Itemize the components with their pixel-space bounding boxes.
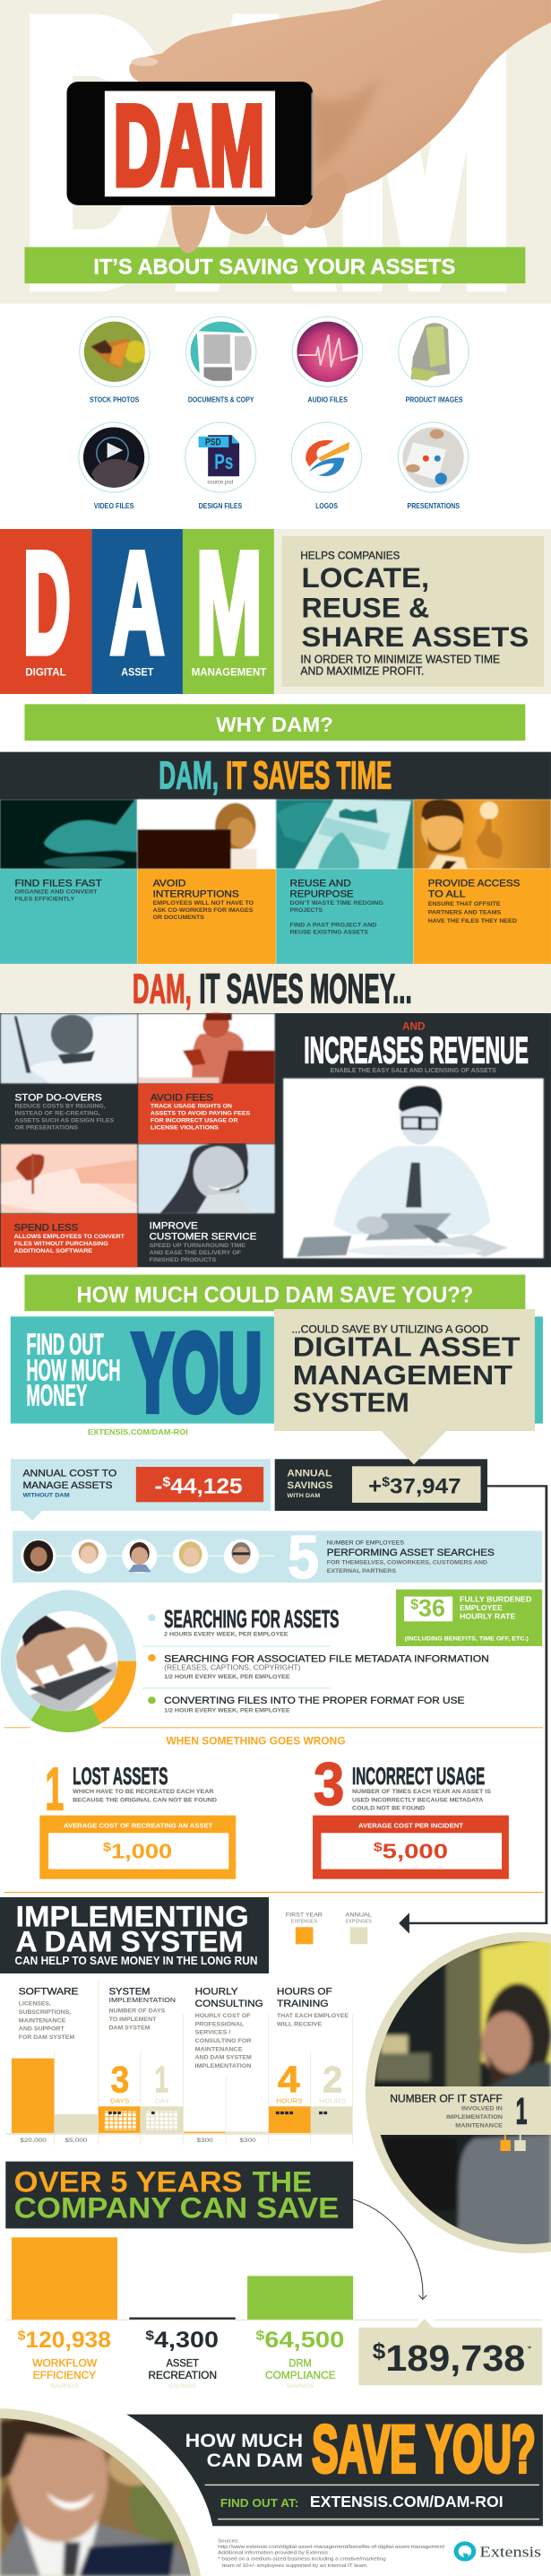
panel: savings calculator [1, 1309, 543, 1732]
panel: hourly rate: 36 [418, 1596, 445, 1622]
panel: annual savings: $ [382, 1476, 390, 1489]
column text: hours of training: THAT EACH EMPLOYEE [277, 2012, 349, 2019]
panel: money savings and revenue [0, 964, 551, 1311]
icon: hand holding phone [67, 0, 551, 253]
callout: could save with DAM system: ...COULD SAVE BY UTILIZING A GOOD [292, 1323, 488, 1335]
panel: provide access to all: PARTNERS AND TEAMS [428, 908, 501, 915]
panel: lost assets: 1,000 [111, 1841, 172, 1863]
chart labels: DAYS [110, 2097, 129, 2105]
panel: incorrect usage: $ [374, 1841, 383, 1854]
column text: hours of training [277, 1985, 349, 2027]
photo: man touching screen [414, 800, 551, 869]
panel: helps companies: IN ORDER TO MINIMIZE WASTED TIME [300, 652, 500, 665]
chart labels: 2 [323, 2060, 342, 2101]
column text: hourly consulting: HOURLY COST OF [195, 2012, 251, 2019]
list: searching for metadata: (RELEASES, CAPTIONS, COPYRIGHT) [164, 1663, 300, 1671]
column text: system implementation: IMPLEMENTATION [109, 1997, 176, 2004]
icon: calendar one day [146, 2112, 178, 2130]
panel: avoid fees: AVOID FEES [151, 1091, 213, 1103]
icon: Extensis logo: Extensis [479, 2543, 541, 2560]
panel: reuse and repurpose: DON’T WASTE TIME REDOING [290, 899, 383, 906]
panel: provide access to all [414, 800, 551, 964]
icon: design files: PSD [205, 436, 221, 447]
panel: annual cost: - [155, 1474, 163, 1498]
list: converting files: CONVERTING FILES INTO THE PROPER FORMAT FOR USE [164, 1695, 464, 1706]
icon: four hours [276, 2112, 293, 2114]
callout: could save with DAM system [274, 1309, 535, 1431]
stat: workflow efficiency [18, 2327, 111, 2390]
list: searching for assets [142, 1606, 339, 1647]
stat: asset recreation: 4,300 [154, 2327, 219, 2353]
stat: DRM compliance: DRM [288, 2357, 312, 2369]
panel: reuse and repurpose: PROJECTS [290, 906, 323, 914]
panel: incorrect usage: COULD NOT BE FOUND [352, 1804, 425, 1811]
panel: employees performing searches [13, 1523, 542, 1592]
panel: helps companies: LOCATE, [302, 563, 429, 594]
panel: IT staff band: INVOLVED IN [461, 2105, 503, 2112]
arrow: curve to total [353, 2199, 426, 2299]
banner: how much can DAM save you: EXTENSIS.COM/DAM-ROI [310, 2494, 504, 2511]
panel: provide access to all: TO ALL [428, 889, 466, 899]
heading: over five years [5, 2162, 353, 2228]
chart: five year savings bars [6, 2237, 542, 2320]
panel: annual cost: WITHOUT DAM [22, 1491, 70, 1498]
column text: hourly consulting: CONSULTING [195, 1998, 263, 2009]
heading: DAM it saves time: IT SAVES TIME [226, 754, 392, 797]
text block: sources: Additional information provided by Extensis [218, 2551, 328, 2556]
panel: avoid fees: TRACK USAGE RIGHTS ON [151, 1102, 232, 1109]
panel: incorrect usage: NUMBER OF TIMES EACH YEAR AN ASSET IS [352, 1788, 491, 1795]
asset type labels: PRODUCT IMAGES [406, 396, 463, 403]
icon: video files [79, 422, 149, 492]
panel: incorrect usage: AVERAGE COST PER INCIDENT [358, 1822, 463, 1829]
chart labels: 3 [111, 2060, 129, 2101]
stat: DRM compliance: 64,500 [264, 2327, 344, 2353]
stat: asset recreation: SAVINGS [168, 2383, 196, 2390]
panel: helps companies: SHARE ASSETS [302, 622, 529, 653]
panel: annual cost: ANNUAL COST TO [22, 1468, 117, 1479]
text block: sources [218, 2539, 445, 2569]
panel: lost assets: 1 [45, 1755, 64, 1823]
stat: workflow efficiency: $ [18, 2329, 26, 2343]
text block: sources: * based on a medium-sized business including a creative/marketing [218, 2557, 386, 2563]
panel: improve customer service: AND EASE THE DELIVERY OF [150, 1249, 242, 1256]
stat: asset recreation [145, 2327, 219, 2390]
stat: workflow efficiency: WORKFLOW [32, 2357, 98, 2369]
asset type labels: PRESENTATIONS [408, 502, 460, 510]
chart labels: $20,000 [20, 2137, 47, 2144]
heading: DAM it saves money: DAM, [133, 966, 192, 1011]
icon: audio files [292, 317, 363, 386]
asset type labels: VIDEO FILES [94, 502, 134, 510]
panel: reuse and repurpose: FIND A PAST PROJECT AND [290, 921, 376, 928]
icon: design files [185, 422, 255, 492]
panel: what DAM means and time savings [0, 523, 551, 964]
chart: time spent donut with typing photo [1, 1590, 136, 1732]
heading: how much could DAM save you [24, 1275, 525, 1311]
chart labels: $300 [239, 2137, 256, 2144]
asset type labels: LOGOS [315, 502, 338, 510]
heading: implementing a DAM system: CAN HELP TO SAVE MONEY IN THE LONG RUN [14, 1954, 257, 1967]
stat: total savings: * [528, 2345, 532, 2354]
panel: spend less [1, 1144, 137, 1267]
photo: hand on mouse [0, 800, 137, 869]
photo: hand writing on papers [1, 1144, 137, 1213]
tagline banner: IT’S ABOUT SAVING YOUR ASSETS [93, 256, 455, 279]
stat: asset recreation: RECREATION [149, 2370, 217, 2381]
panel: when something goes wrong and implementation [0, 1486, 547, 2069]
chart: implementation costs [6, 1981, 352, 2145]
column text: hours of training: TRAINING [277, 1998, 329, 2009]
icon: hand holding phone: DAM [114, 82, 264, 210]
DAM acronym blocks: DIGITAL [25, 665, 66, 678]
list: converting files [148, 1695, 464, 1713]
photo: hands and report [276, 800, 413, 869]
stat: asset recreation: ASSET [167, 2357, 199, 2369]
panel: find files fast [0, 800, 137, 964]
url: ROI calculator: EXTENSIS.COM/DAM-ROI [88, 1428, 188, 1436]
heading: implementing a DAM system [0, 1897, 269, 1973]
panel: avoid interruptions: INTERRUPTIONS [153, 889, 239, 899]
panel: annual savings: + [368, 1474, 383, 1498]
legend: expense types: EXPENSES [346, 1920, 372, 1924]
asset type labels: DESIGN FILES [199, 502, 243, 510]
panel: avoid interruptions: ASK CO-WORKERS FOR IMAGES [153, 906, 254, 914]
icon: stock photos [80, 317, 150, 386]
photo: smiling man with tablet [0, 2408, 206, 2576]
legend: expense types [286, 1912, 372, 1944]
panel: employees performing searches: 5 [288, 1523, 319, 1592]
panel: lost assets: LOST ASSETS [73, 1764, 168, 1790]
heading: DAM it saves time: DAM, [159, 754, 219, 797]
DAM acronym blocks [0, 523, 274, 694]
panel: IT staff band: 1 [516, 2092, 527, 2132]
tagline banner [24, 247, 525, 283]
panel: spend less: ALLOWS EMPLOYEES TO CONVERT [14, 1233, 125, 1240]
stat: DRM compliance: COMPLIANCE [265, 2370, 336, 2381]
panel: incorrect usage: USED INCORRECTLY BECAUSE METADATA [352, 1796, 484, 1803]
panel: annual cost: $ [162, 1476, 170, 1489]
text block: sources: http://www.extensis.com/digital-asset-management/benefits-of-digital-asset-management [218, 2545, 445, 2550]
column text: software: FOR DAM SYSTEM [19, 2034, 74, 2041]
panel: helps companies: HELPS COMPANIES [300, 549, 400, 561]
icon: presentations [398, 422, 469, 492]
heading: DAM it saves money [0, 964, 551, 1013]
column text: hourly consulting: PROFESSIONAL [195, 2020, 245, 2027]
legend: expense types: ANNUAL [346, 1912, 372, 1918]
panel: find files fast: FIND FILES FAST [14, 877, 102, 889]
photo: stressed woman with tablet [138, 1012, 275, 1083]
stat: DRM compliance [256, 2327, 344, 2390]
banner: how much can DAM save you: FIND OUT AT: [220, 2496, 298, 2510]
column text: hourly consulting: MAINTENANCE [195, 2045, 243, 2052]
heading: when something goes wrong: WHEN SOMETHING GOES WRONG [167, 1735, 346, 1747]
panel: annual savings [275, 1431, 487, 1511]
panel: lost assets: AVERAGE COST OF RECREATING AN ASSET [64, 1822, 213, 1829]
column text: system implementation: SYSTEM [109, 1985, 150, 1997]
banner: find out how much money you: YOU [133, 1313, 262, 1433]
chart labels: $300 [197, 2137, 213, 2144]
DAM acronym blocks: A [110, 523, 164, 683]
panel: incorrect usage: 5,000 [383, 1841, 448, 1863]
column text: hours of training: WILL RECEIVE [277, 2020, 322, 2027]
photo: smiling headset operator [138, 1144, 275, 1213]
panel: lost assets [39, 1755, 236, 1879]
panel: annual savings: WITH DAM [287, 1492, 320, 1499]
chart labels: 1 [155, 2060, 168, 2101]
panel: provide access to all: ENSURE THAT OFFSITE [428, 900, 501, 907]
panel: employees performing searches: EXTERNAL PARTNERS [327, 1567, 396, 1574]
chart labels: 4 [278, 2060, 300, 2101]
column text: system implementation: DAM SYSTEM [109, 2024, 150, 2031]
panel: find files fast: ORGANIZE AND CONVERT [14, 888, 98, 895]
panel: IT staff band [358, 2086, 551, 2151]
panel: incorrect usage: 3 [314, 1749, 344, 1817]
heading: implementing a DAM system: A DAM SYSTEM [16, 1926, 243, 1958]
photo: businessman with clipboard [283, 1079, 544, 1258]
panel: employees performing searches: FOR THEMSELVES, COWORKERS, CUSTOMERS AND [327, 1558, 487, 1566]
icon: Extensis logo [456, 2543, 541, 2561]
panel: lost assets: WHICH HAVE TO BE RECREATED EACH YEAR [73, 1788, 214, 1795]
panel: avoid fees: ASSETS TO AVOID PAYING FEES [151, 1109, 250, 1116]
panel: hourly rate [396, 1590, 542, 1646]
panel: IT staff band: IMPLEMENTATION [446, 2113, 503, 2121]
photo: man head on laptop [1, 1014, 137, 1083]
icon: two hours [319, 2112, 327, 2114]
arrow: savings connector [399, 1486, 547, 1934]
panel: reuse and repurpose: REUSE EXISTING ASSETS [290, 928, 368, 935]
stat: workflow efficiency: 120,938 [25, 2327, 111, 2353]
panel: annual cost [11, 1459, 271, 1521]
heading: implementing a DAM system: IMPLEMENTING [16, 1901, 249, 1933]
list: searching for assets: 2 HOURS EVERY WEEK, PER EMPLOYEE [164, 1630, 288, 1637]
list: searching for metadata: SEARCHING FOR ASSOCIATED FILE METADATA INFORMATION [164, 1652, 489, 1664]
panel: annual savings: ANNUAL [287, 1468, 332, 1479]
panel: annual savings: 37,947 [390, 1474, 461, 1498]
panel: reuse and repurpose [276, 800, 413, 964]
panel: hero [0, 0, 551, 510]
panel: annual savings: SAVINGS [287, 1479, 332, 1491]
panel: hourly rate: (INCLUDING BENEFITS, TIME OFF, ETC.) [405, 1635, 529, 1642]
panel: find files fast: FILES EFFICIENTLY [14, 895, 74, 902]
panel: reuse and repurpose: REUSE AND [290, 877, 351, 889]
list: searching for metadata [142, 1652, 489, 1688]
column text: software: SOFTWARE [19, 1985, 78, 1997]
column text: hourly consulting: SERVICES / [195, 2028, 230, 2035]
column text: software [19, 1985, 78, 2041]
callout: could save with DAM system: SYSTEM [293, 1387, 409, 1418]
callout: could save with DAM system: MANAGEMENT [293, 1360, 512, 1391]
icon: employee portraits [21, 1540, 259, 1574]
banner: find out how much money you: FIND OUT [26, 1327, 104, 1361]
column text: hourly consulting: AND DAM SYSTEM [195, 2053, 252, 2060]
heading: over five years: THE [253, 2166, 312, 2199]
asset types grid [79, 317, 469, 510]
panel: reuse and repurpose: REPURPOSE [290, 889, 354, 899]
asset type labels [90, 396, 463, 510]
panel: improve customer service: IMPROVE [150, 1219, 198, 1231]
stat: workflow efficiency: SAVINGS [50, 2383, 79, 2390]
panel: IT staff band: MAINTENANCE [455, 2122, 503, 2129]
column text: software: MAINTENANCE [19, 2017, 65, 2024]
DAM acronym blocks: D [23, 523, 71, 683]
panel: helps companies: AND MAXIMIZE PROFIT. [300, 664, 424, 677]
column text: hourly consulting: IMPLEMENTATION [195, 2062, 251, 2069]
asset type labels: DOCUMENTS & COPY [188, 396, 254, 403]
panel: hourly rate: EMPLOYEE [460, 1604, 503, 1612]
DAM acronym blocks: ASSET [121, 665, 153, 678]
panel: stop do-overs: ASSETS SUCH AS DESIGN FILES [14, 1116, 114, 1123]
heading: DAM it saves time [0, 752, 551, 800]
stat: total savings: 189,738 [385, 2338, 525, 2379]
chart labels: $5,000 [65, 2137, 87, 2144]
banner: how much can DAM save you [126, 2412, 543, 2526]
column text: software: SUBSCRIPTIONS, [19, 2008, 71, 2016]
panel: stop do-overs: STOP DO-OVERS [14, 1091, 102, 1103]
banner: how much can DAM save you: HOW MUCH [185, 2429, 303, 2451]
legend: expense types: FIRST YEAR [286, 1912, 323, 1918]
panel: avoid interruptions: EMPLOYEES WILL NOT HAVE TO [153, 899, 254, 906]
heading: over five years: OVER 5 YEARS [14, 2166, 243, 2199]
panel: avoid fees [138, 1012, 275, 1143]
panel: increases revenue [283, 1020, 544, 1258]
panel: stop do-overs [1, 1014, 137, 1131]
banner: find out how much money you [11, 1313, 543, 1433]
chart labels: HOURS [319, 2097, 346, 2105]
banner: find out how much money you: MONEY [26, 1378, 87, 1412]
panel: stop do-overs: REDUCE COSTS BY REUSING, [14, 1102, 106, 1109]
panel: hourly rate: $ [410, 1596, 418, 1612]
heading: why DAM [24, 704, 525, 741]
panel: spend less: FILES WITHOUT PURCHASING [14, 1240, 108, 1247]
asset type labels: AUDIO FILES [308, 396, 348, 403]
panel: avoid interruptions: OR DOCUMENTS [153, 914, 204, 921]
list: converting files: 1/2 HOUR EVERY WEEK, PER EMPLOYEE [164, 1706, 290, 1713]
column text: system implementation [109, 1985, 176, 2031]
icon: product images [399, 317, 469, 386]
chart labels: DAY [155, 2097, 170, 2105]
panel: savings calculator: SEARCHING FOR ASSETS [164, 1606, 339, 1633]
icon: design files: Ps [214, 450, 233, 474]
column text: software: AND SUPPORT [19, 2025, 65, 2032]
panel: improve customer service [138, 1144, 275, 1263]
panel: improve customer service: SPEED UP TURNAROUND TIME [150, 1242, 245, 1249]
heading: how much could DAM save you: HOW MUCH COULD DAM SAVE YOU?? [76, 1283, 473, 1307]
panel: stop do-overs: INSTEAD OF RE-CREATING, [14, 1109, 100, 1116]
banner: find out how much money you: HOW MUCH [26, 1353, 121, 1387]
panel: spend less: SPEND LESS [14, 1222, 78, 1233]
panel: provide access to all: HAVE THE FILES THEY NEED [428, 917, 517, 924]
DAM acronym blocks: MANAGEMENT [192, 665, 266, 678]
legend: expense types: EXPENSES [291, 1920, 317, 1924]
DAM acronym blocks: M [196, 523, 263, 683]
column text: hours of training: HOURS OF [277, 1985, 332, 1997]
panel: avoid fees: LICENSE VIOLATIONS [151, 1123, 219, 1131]
chart labels [20, 2060, 346, 2144]
panel: IT staff band: NUMBER OF IT STAFF [390, 2093, 503, 2105]
column text: hourly consulting: HOURLY [195, 1985, 238, 1997]
panel: avoid interruptions [137, 800, 276, 964]
banner: how much can DAM save you: CAN DAM [207, 2449, 303, 2471]
column text: hourly consulting: CONSULTING FOR [195, 2037, 252, 2044]
stat: DRM compliance: $ [256, 2329, 265, 2343]
icon: design files: source.psd [207, 480, 234, 486]
column text: hourly consulting [195, 1985, 263, 2069]
stat: workflow efficiency: EFFICIENCY [33, 2370, 96, 2381]
heading: why DAM: WHY DAM? [216, 714, 333, 736]
stat: total savings: $ [373, 2338, 386, 2364]
text block: sources: team of 10+/- employees supported by an internal IT team. [222, 2563, 369, 2569]
callout: could save with DAM system: DIGITAL ASSET [293, 1331, 521, 1363]
panel: avoid fees: FOR INCORRECT USAGE OR [151, 1116, 238, 1123]
panel: stop do-overs: OR PRESENTATIONS [14, 1123, 78, 1131]
text block: sources: Sources: [218, 2539, 239, 2544]
panel: spend less: ADDITIONAL SOFTWARE [14, 1247, 92, 1254]
panel: hourly rate: HOURLY RATE [460, 1612, 515, 1620]
panel: provide access to all: PROVIDE ACCESS [428, 877, 520, 889]
panel: increases revenue: AND [402, 1020, 426, 1032]
column text: system implementation: NUMBER OF DAYS [109, 2007, 165, 2014]
panel: employees performing searches: PERFORMING ASSET SEARCHES [327, 1547, 495, 1558]
panel: avoid interruptions: AVOID [153, 877, 186, 889]
stat: DRM compliance: SAVINGS [287, 2383, 314, 2390]
icon: calendar three days [104, 2112, 136, 2130]
panel: costs chart and five year savings [5, 1981, 543, 2569]
list: searching for metadata: 1/2 HOUR EVERY WEEK, PER EMPLOYEE [164, 1673, 290, 1680]
stat: asset recreation: $ [145, 2329, 154, 2343]
panel: improve customer service: FINISHED PRODUCTS [150, 1256, 216, 1263]
panel: annual cost: MANAGE ASSETS [22, 1479, 113, 1491]
icon: documents and copy [185, 317, 256, 386]
panel: lost assets: $ [103, 1841, 112, 1854]
panel: hourly rate: FULLY BURDENED [460, 1595, 532, 1603]
panel: employees performing searches: NUMBER OF EMPLOYEES [327, 1540, 404, 1546]
panel: lost assets: BECAUSE THE ORIGINAL CAN NOT BE FOUND [73, 1796, 217, 1803]
panel: incorrect usage [313, 1749, 509, 1879]
asset type labels: STOCK PHOTOS [90, 396, 140, 403]
column text: software: LICENSES, [19, 1999, 51, 2007]
photo: interrupted employee [137, 800, 276, 869]
stat: total savings [358, 2319, 542, 2385]
panel: helps companies [274, 529, 551, 694]
panel: improve customer service: CUSTOMER SERVICE [150, 1231, 256, 1242]
panel: helps companies: REUSE & [302, 593, 429, 624]
heading: over five years: COMPANY CAN SAVE [14, 2192, 339, 2225]
chart labels: HOURS [276, 2097, 303, 2105]
panel: IT staff circle photo [358, 1932, 551, 2253]
panel: increases revenue: ENABLE THE EASY SALE AND LICENSING OF ASSETS [331, 1067, 496, 1074]
column text: system implementation: TO IMPLEMENT [109, 2016, 157, 2023]
icon: logos [291, 422, 362, 492]
panel: annual cost: 44,125 [170, 1474, 243, 1498]
